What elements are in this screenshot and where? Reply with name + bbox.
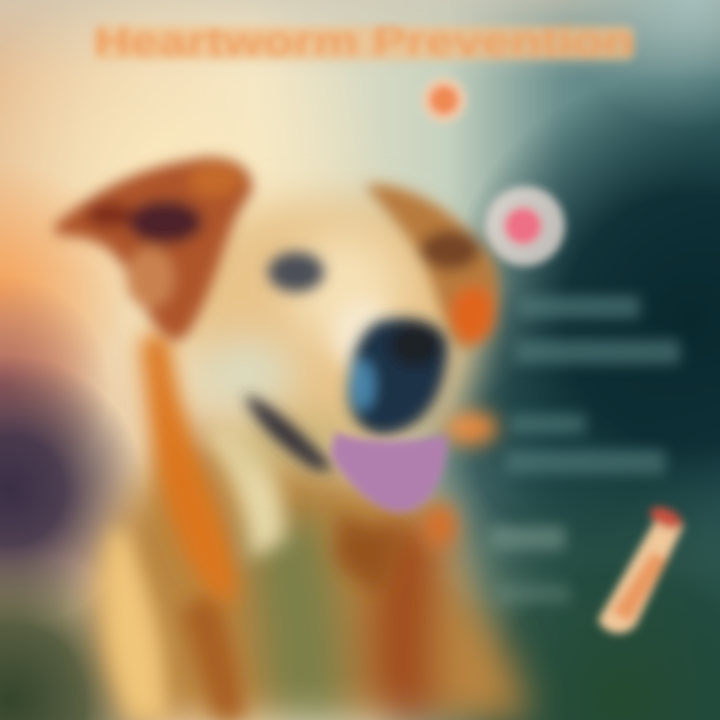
icon: medicine tube (598, 503, 685, 633)
icon: orange dot (422, 78, 466, 122)
dog: eye (268, 252, 324, 292)
dog: left ear (55, 157, 252, 340)
dog: neck and chest (140, 330, 400, 602)
dog: mouth (245, 395, 335, 470)
text block 3 (490, 526, 570, 604)
dog: right ear (365, 185, 499, 350)
dog: snout highlight (332, 300, 392, 370)
dog: head (175, 200, 475, 466)
dog: body fur (99, 420, 530, 720)
text block 1 (515, 296, 680, 364)
title: Heartworm Prevention (94, 18, 634, 64)
dog: tongue (330, 432, 447, 512)
dog illustration (55, 157, 530, 720)
text block 2 (505, 414, 665, 474)
dog: fur highlights (102, 411, 498, 720)
icon: heart badge (485, 186, 565, 266)
dog: nose (348, 318, 448, 435)
